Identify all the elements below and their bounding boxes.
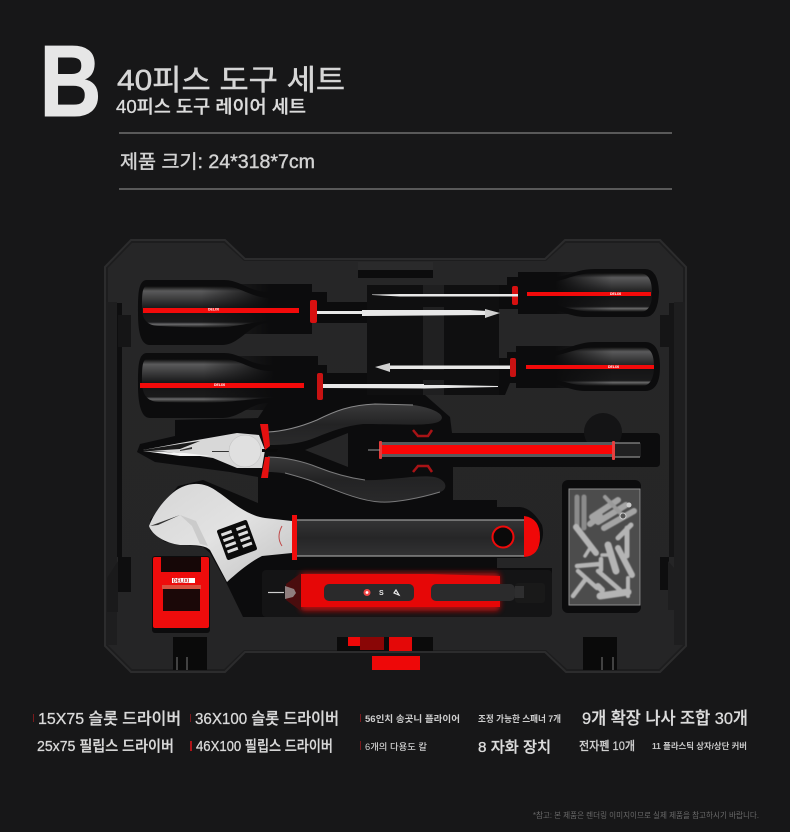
wrench ring	[492, 526, 514, 548]
wrench red collar	[292, 515, 297, 560]
red latch	[337, 637, 433, 670]
slotted screwdriver 15X75: DELIXI	[208, 308, 219, 312]
tray shell	[105, 240, 686, 672]
phillips screwdriver 46X100: DELIXI	[608, 365, 619, 369]
voltage tester pen: S	[379, 590, 384, 597]
label: tester pen: 전자펜 10개	[579, 739, 635, 753]
long-nose pliers	[143, 404, 445, 502]
header	[40, 26, 672, 190]
plier handle lower	[268, 457, 445, 502]
wrench knurl	[216, 519, 258, 561]
pocket: screw box	[562, 480, 641, 613]
plier handle upper	[268, 404, 442, 445]
plier red clips	[413, 430, 432, 472]
pocket: bit holder	[152, 556, 210, 633]
pocket: pliers, knife and wrench	[137, 395, 660, 617]
tool tray	[105, 240, 686, 672]
label: 36X100 slotted: 36X100 슬롯 드라이버	[195, 710, 339, 728]
centre shaft pocket	[367, 285, 499, 395]
label: plastic box: 11 플라스틱 상자/상단 커버	[652, 741, 747, 751]
utility knife	[368, 441, 641, 460]
wrench handle	[295, 520, 524, 556]
pockets	[137, 269, 660, 633]
label: wrench: 조정 가능한 스패너 7개	[478, 713, 561, 724]
slotted screwdriver 36X100: DELIXI	[214, 383, 225, 387]
parts list	[33, 709, 748, 756]
pocket: right screwdriver 1	[497, 269, 659, 317]
plier jaws	[143, 433, 265, 468]
plier red collars	[260, 424, 270, 478]
phillips screwdriver 25x75: DELIXI	[610, 292, 621, 296]
bottom right notch	[583, 637, 617, 670]
subtitle: 40피스 도구 레이어 세트	[116, 97, 306, 117]
title: 40피스 도구 세트	[117, 65, 345, 97]
pocket: left screwdriver 1	[138, 280, 367, 345]
label: 15X75 slotted: 15X75 슬롯 드라이버	[38, 710, 181, 728]
bottom left notch	[173, 637, 207, 670]
bit holder	[153, 557, 209, 628]
label: utility knife: 6개의 다용도 칼	[365, 741, 427, 752]
tray ribs	[305, 285, 444, 467]
adjustable wrench	[149, 484, 540, 582]
label: magnetizer: 8 자화 장치	[478, 739, 551, 756]
wrench steel head	[149, 484, 292, 582]
label: bit set: 9개 확장 나사 조합 30개	[582, 709, 748, 728]
label: pliers: 56인치 송곳니 플라이어	[365, 713, 460, 724]
label: 25x75 phillips: 25x75 필립스 드라이버	[37, 738, 174, 755]
pocket: right screwdriver 2	[497, 342, 660, 395]
pocket: left screwdriver 2	[138, 353, 367, 418]
product size: 제품 크기: 24*318*7cm	[120, 151, 315, 173]
phillips screwdriver 25x75	[372, 272, 652, 314]
tray inner surface	[108, 243, 683, 669]
screw box	[569, 489, 640, 605]
label: 46X100 phillips: 46X100 필립스 드라이버	[196, 738, 333, 755]
bit holder: DELIXI	[173, 578, 190, 584]
phillips screwdriver 46X100	[375, 346, 654, 388]
slotted screwdriver 15X75	[142, 284, 500, 334]
slotted screwdriver 36X100	[140, 356, 498, 410]
voltage tester pen	[262, 570, 552, 617]
footnote: *참고: 본 제품은 렌더링 이미지이므로 실제 제품을 참고하시기 바랍니다.	[533, 810, 759, 820]
letter B badge: B	[40, 26, 102, 138]
wrench red end cap	[524, 516, 540, 557]
